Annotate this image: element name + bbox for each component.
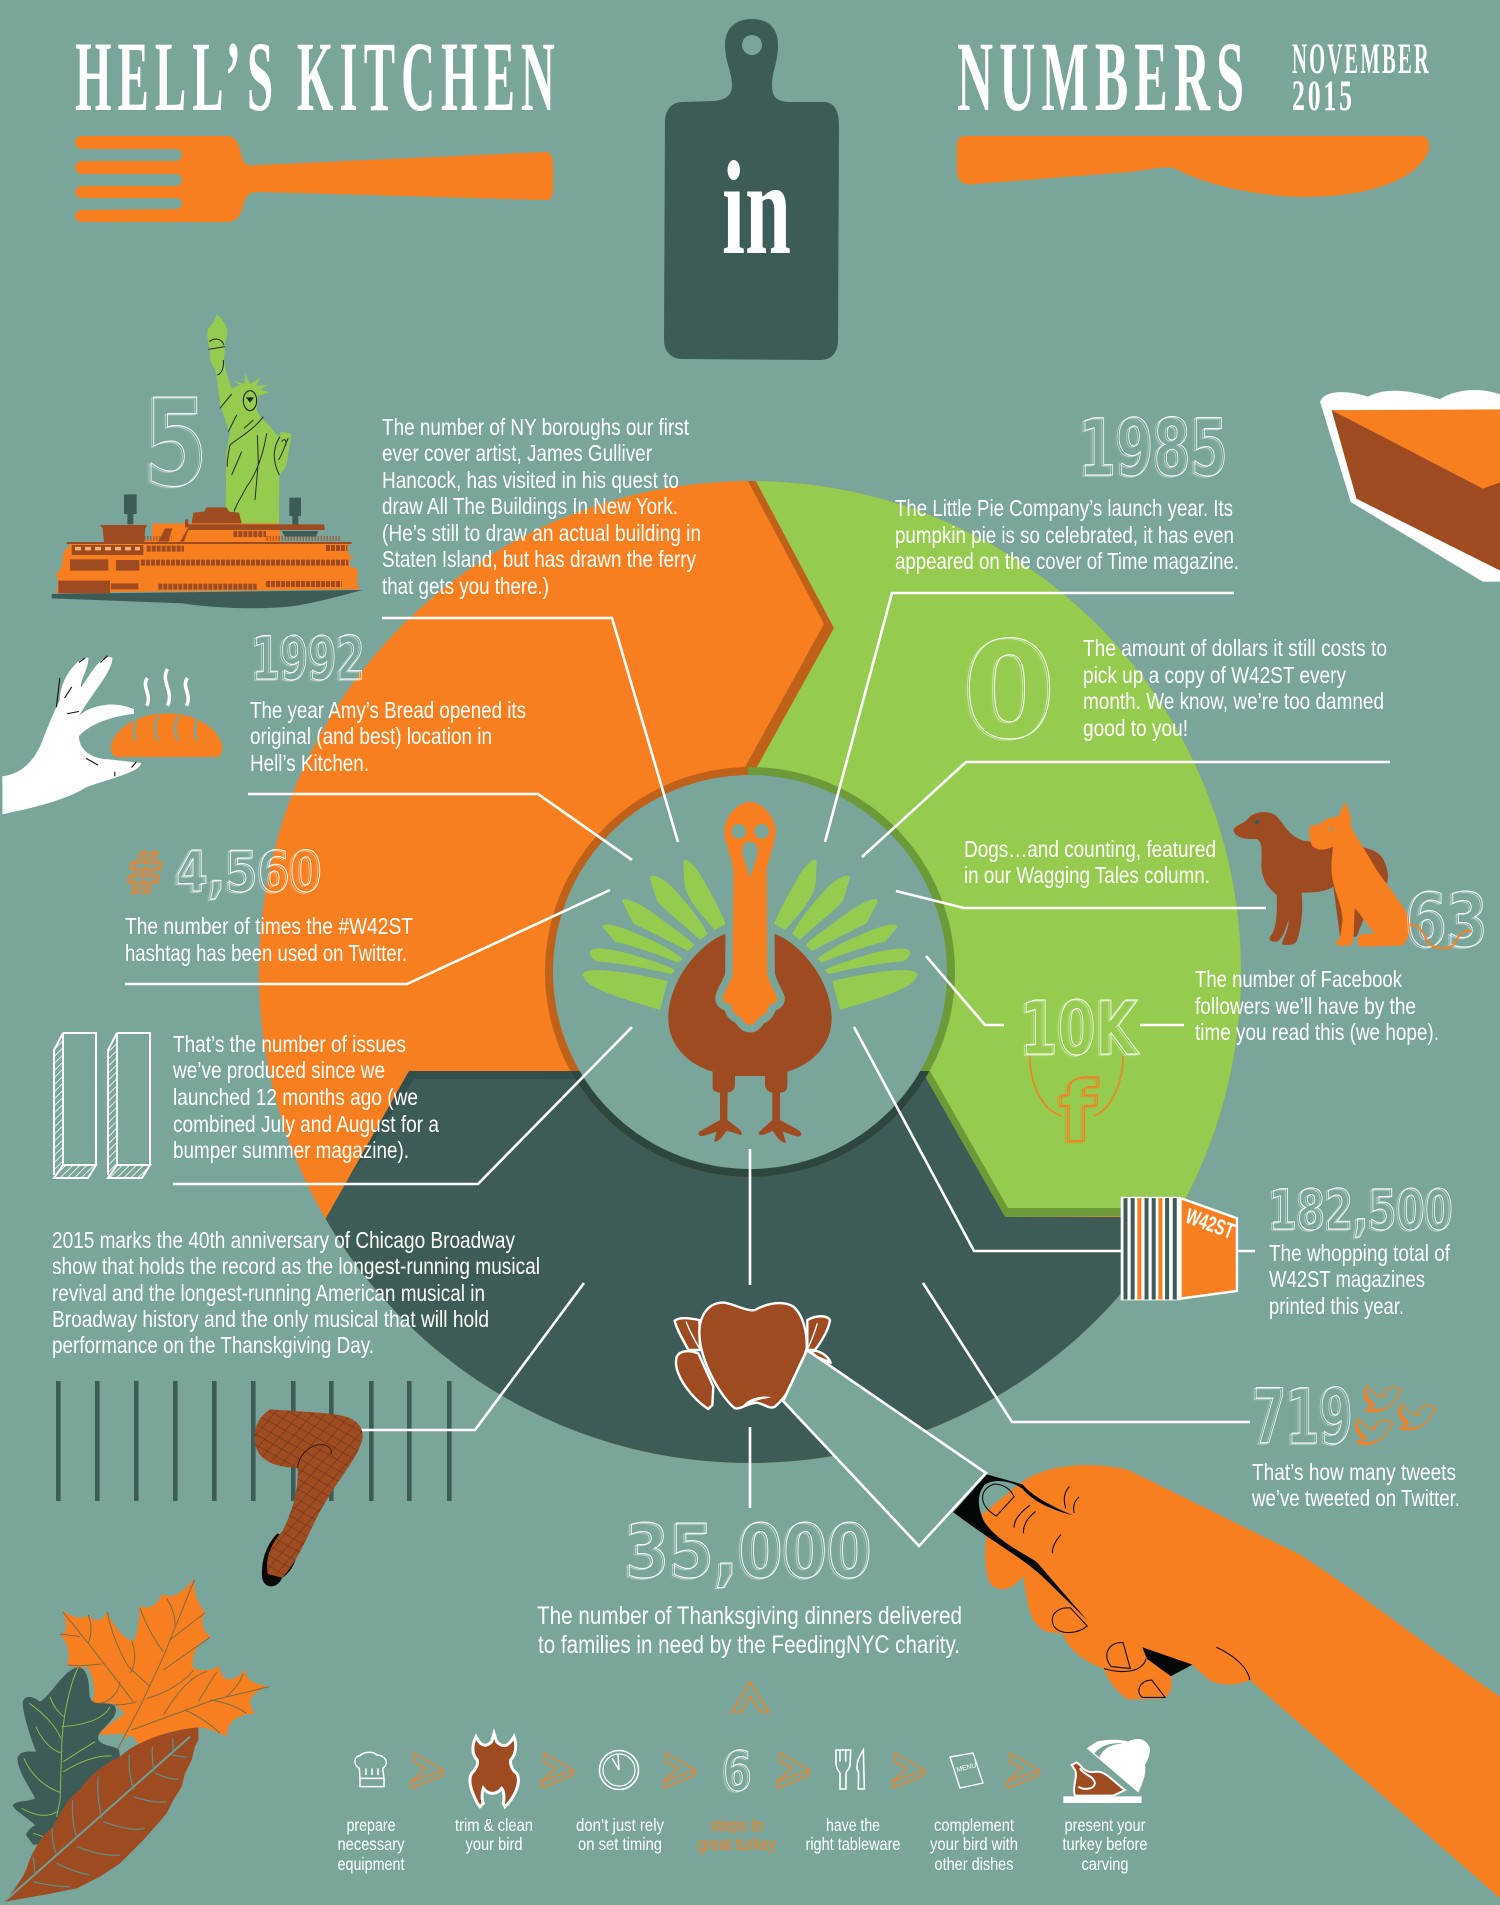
step text: carving [1062, 1815, 1148, 1874]
arrow: step 5 [892, 1753, 924, 1788]
step text: timing: don’t just rely [576, 1815, 664, 1835]
step text: timing [576, 1815, 664, 1854]
number: hashtag 4,560: # [127, 841, 165, 906]
turkey body [668, 934, 832, 1143]
magazine title: W42ST [1182, 1203, 1238, 1244]
text: magazines: W42ST magazines [1269, 1266, 1425, 1292]
text: chicago: show that holds the record as the longest-running musical [52, 1253, 540, 1279]
step text: trim [455, 1815, 533, 1854]
ferry masts [124, 494, 318, 537]
text: amy's bread: The year Amy’s Bread opened its [250, 697, 526, 723]
dark segment shadow [345, 1071, 926, 1185]
text: pie company [895, 495, 1239, 574]
text: thanksgiving dinners [537, 1602, 962, 1659]
text: artist: (He’s still to draw an actual building in [382, 520, 701, 546]
text: pie company: appeared on the cover of Time magazine. [895, 548, 1239, 574]
date [1292, 36, 1429, 120]
step text: dishes [930, 1815, 1018, 1874]
icon: cutting board [664, 19, 839, 360]
icon: clock [600, 1750, 638, 1790]
arrow: up chevron [732, 1682, 769, 1712]
icon: facebook f with lines: f [1060, 1063, 1100, 1161]
text: artist: Hancock, has visited in his quest to [382, 467, 679, 493]
panel: green segment [756, 481, 1241, 1217]
icon: magazine stack [1121, 1197, 1237, 1300]
icon: knife [957, 136, 1429, 197]
illustration: dogs [1233, 803, 1410, 947]
step text: tableware: have the [826, 1815, 880, 1835]
text: chicago: revival and the longest-running American musical in [52, 1280, 485, 1306]
text: dogs [964, 836, 1216, 888]
orange maple leaf [60, 1578, 269, 1750]
hand [2, 657, 141, 814]
title: Numbers: NUMBERS [957, 23, 1244, 133]
pie chart background [259, 481, 1241, 1463]
text: facebook [1195, 966, 1439, 1045]
text: amy's bread: original (and best) location in [250, 723, 492, 749]
dark oak leaf [13, 1667, 120, 1845]
stage bars [56, 1381, 452, 1501]
date: NOVEMBER [1292, 36, 1429, 83]
orange segment shadow [745, 481, 834, 768]
text: hashtag: hashtag has been used on Twitter. [125, 940, 407, 966]
text: dogs: in our Wagging Tales column. [964, 862, 1210, 888]
text: free copy [1083, 635, 1387, 741]
neck outline [723, 802, 777, 1025]
panel: orange segment [259, 481, 1241, 1463]
text: chicago: performance on the Thanskgiving Day. [52, 1332, 374, 1358]
ferry superstructure [58, 507, 352, 593]
number: 35,000: 35,000 [625, 1509, 872, 1595]
chicken body [699, 1303, 807, 1408]
step text: carving: carving [1082, 1854, 1128, 1874]
turkey head and neck [723, 802, 777, 1025]
icon: menu [950, 1753, 983, 1788]
arrow: step 2 [541, 1753, 573, 1788]
text: dogs: Dogs…and counting, featured [964, 836, 1216, 862]
text: hashtag [125, 913, 413, 966]
icon: fork [75, 136, 553, 222]
step text: dishes: other dishes [934, 1854, 1014, 1874]
text: amy's bread [250, 697, 526, 776]
arrow: step 3 [663, 1753, 695, 1788]
icon: menu: MENU [956, 1762, 977, 1774]
icon: facebook f with lines [1030, 1056, 1123, 1161]
text: tweets: That’s how many tweets [1252, 1459, 1456, 1485]
illustration: pumpkin pie slice [1320, 390, 1500, 582]
arrow: step 6 [1007, 1753, 1039, 1788]
brown dog [1233, 812, 1388, 945]
dog tail [1410, 925, 1472, 948]
illustration: statue of liberty [207, 314, 292, 523]
step text: equipment: equipment [338, 1854, 405, 1874]
text: hashtag: The number of times the #W42ST [125, 913, 413, 939]
text: chicago [52, 1227, 540, 1358]
step text: equipment [338, 1815, 405, 1874]
left feathers [582, 860, 726, 1010]
step text: tableware [806, 1815, 900, 1854]
number: hashtag 4,560 [127, 840, 322, 906]
illustration: ferry [52, 494, 363, 608]
number: 0: 0 [963, 613, 1056, 769]
step text: timing: on set timing [578, 1834, 662, 1854]
bread [111, 714, 222, 757]
title: in: in [722, 134, 791, 282]
text: artist: The number of NY boroughs our first [382, 414, 689, 440]
text: free copy: pick up a copy of W42ST every [1083, 662, 1346, 688]
illustration: hand with bread [2, 656, 222, 814]
step text: dishes: your bird with [930, 1834, 1018, 1854]
text: issues: bumper summer magazine). [173, 1137, 409, 1163]
text: artist: ever cover artist, James Gulliver [382, 440, 652, 466]
text: free copy: The amount of dollars it still costs to [1083, 635, 1387, 661]
text: free copy: month. We know, we’re too damned [1083, 688, 1384, 714]
text: facebook: The number of Facebook [1195, 966, 1402, 992]
text: artist: that gets you there.) [382, 573, 549, 599]
step text: tableware: right tableware [806, 1834, 900, 1854]
steps row [338, 1733, 1150, 1874]
text: magazines: The whopping total of [1269, 1240, 1450, 1266]
icon: chef hat [355, 1752, 386, 1787]
illustration: turkey [582, 802, 918, 1143]
step text: equipment: prepare [346, 1815, 396, 1835]
text: artist: draw All The Buildings In New York. [382, 493, 678, 519]
icon: fork and knife [836, 1750, 864, 1789]
text: amy's bread: Hell’s Kitchen. [250, 750, 369, 776]
text: pie company: pumpkin pie is so celebrated, it has even [895, 522, 1234, 548]
text: magazines: printed this year. [1269, 1293, 1404, 1319]
ferry hull [52, 590, 363, 608]
text: thanksgiving dinners: to families in need by the FeedingNYC charity. [538, 1631, 960, 1659]
illustration: fishnet leg [254, 1409, 363, 1586]
text: free copy: good to you! [1083, 715, 1188, 741]
orange dog [1309, 803, 1410, 947]
title: Hell's Kitchen: HELL’S KITCHEN [75, 20, 555, 132]
icon: carving knife blade [783, 1350, 986, 1546]
icon: cloche with turkey [1063, 1739, 1150, 1803]
icon: small turkey [470, 1733, 518, 1807]
brown leaf [5, 1727, 198, 1902]
illustration: autumn leaves [5, 1578, 269, 1902]
number: 6: 6 [723, 1740, 752, 1803]
number: 1992: 1992 [252, 624, 365, 694]
step text: dishes: complement [934, 1815, 1014, 1835]
number: 719: 719 [1253, 1372, 1353, 1461]
text: issues: combined July and August for a [173, 1111, 440, 1137]
step text: carving: present your [1064, 1815, 1146, 1835]
step text: six steps: great turkey [698, 1834, 776, 1854]
arrow: step 4 [777, 1753, 809, 1788]
knife handle [953, 1474, 1087, 1620]
number: 11 as drawn bars [54, 1033, 150, 1178]
finger lines [983, 1484, 1250, 1697]
number: 1985: 1985 [1079, 404, 1228, 494]
icon: twitter birds [1355, 1386, 1436, 1445]
text: issues: That’s the number of issues [173, 1031, 406, 1057]
steam [145, 669, 188, 706]
green segment shadow [926, 1070, 1121, 1217]
text: artist: Staten Island, but has drawn the ferry [382, 546, 696, 572]
text: artist [382, 414, 701, 599]
center ring [540, 760, 968, 1191]
illustration: plucked chicken [675, 1303, 831, 1409]
text: pie company: The Little Pie Company’s launch year. Its [895, 495, 1233, 521]
step text: six steps: steps to [710, 1815, 764, 1835]
date: 2015 [1292, 71, 1352, 120]
text: thanksgiving dinners: The number of Thanksgiving dinners delivered [537, 1602, 962, 1630]
text: chicago: 2015 marks the 40th anniversary of Chicago Broadway [52, 1227, 515, 1253]
panel: dark segment [326, 1071, 1121, 1463]
number: 10K: 10K [1020, 986, 1140, 1072]
text: issues [172, 1031, 440, 1163]
step text: carving: turkey before [1062, 1834, 1148, 1854]
text: tweets [1251, 1459, 1460, 1511]
text: facebook: followers we’ll have by the [1195, 993, 1416, 1019]
arrow: step 1 [411, 1753, 443, 1788]
step text: six steps [698, 1815, 776, 1854]
number: hashtag 4,560: 4,560 [176, 840, 322, 905]
text: issues: we’ve produced since we [172, 1057, 385, 1083]
text: magazines [1269, 1240, 1450, 1319]
illustration: arm and hand [953, 1465, 1500, 1899]
step text: equipment: necessary [338, 1834, 405, 1854]
number: 5: 5 [144, 375, 208, 514]
text: issues: launched 12 months ago (we [173, 1084, 418, 1110]
right feathers [774, 860, 918, 1010]
step text: trim: your bird [466, 1834, 522, 1854]
text: facebook: time you read this (we hope). [1195, 1019, 1439, 1045]
text: chicago: Broadway history and the only musical that will hold [52, 1306, 489, 1332]
step text: trim: trim & clean [455, 1815, 533, 1835]
callout lines [125, 593, 1390, 1508]
